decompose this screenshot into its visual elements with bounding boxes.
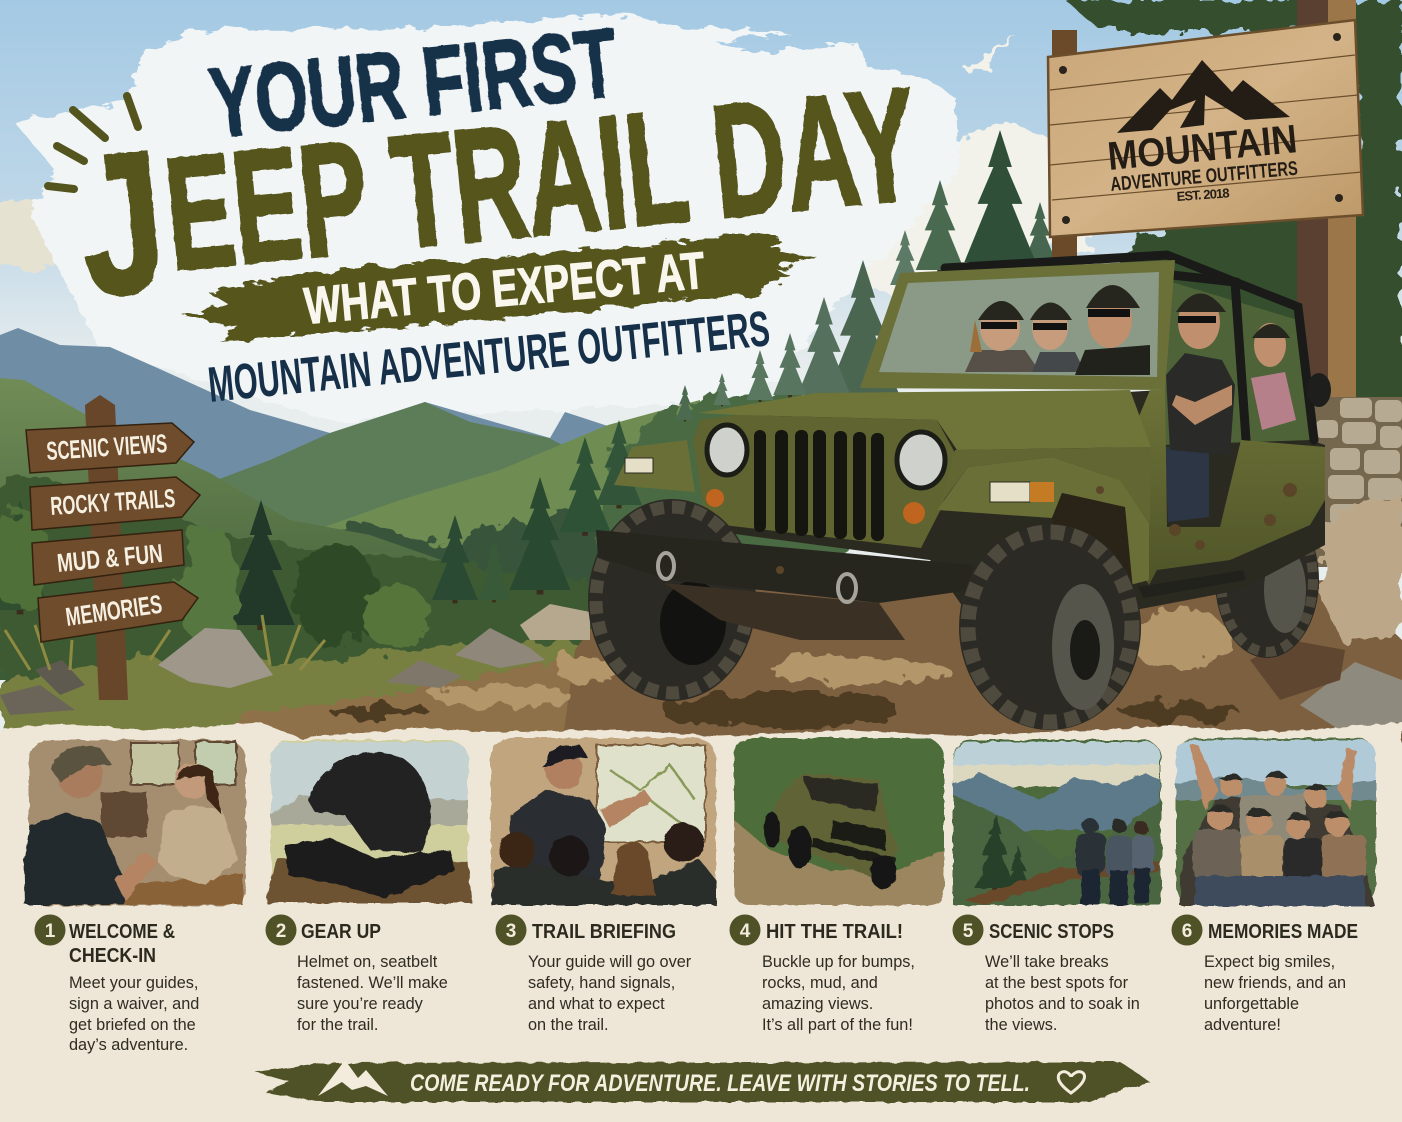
step 4 panel bbox=[730, 738, 944, 1034]
step 4 description: amazing views. bbox=[762, 995, 873, 1013]
arrow: rocky trails: ROCKY TRAILS bbox=[49, 483, 176, 521]
stone wall bbox=[1312, 397, 1402, 567]
arrow: memories bbox=[38, 582, 198, 642]
grille slats bbox=[754, 430, 884, 541]
step number 2 bbox=[266, 914, 296, 946]
hood bbox=[698, 390, 1151, 450]
step 4 description: Buckle up for bumps, bbox=[762, 953, 915, 971]
footer tagline: COME READY FOR ADVENTURE. LEAVE WITH STORIES TO TELL. bbox=[410, 1070, 1030, 1097]
tree canopy bbox=[1065, 0, 1402, 460]
sign subtitle: ADVENTURE OUTFITTERS bbox=[1110, 158, 1299, 196]
step 2 description: sure you’re ready bbox=[297, 995, 424, 1013]
cabin background bbox=[1160, 280, 1312, 445]
front left tire bbox=[588, 499, 756, 701]
mud splatter bbox=[776, 483, 1297, 574]
mirror bbox=[1307, 373, 1331, 407]
step 1 description: get briefed on the bbox=[69, 1016, 196, 1034]
wheel arch bbox=[1052, 493, 1133, 590]
rocks bbox=[0, 604, 590, 715]
step 3 description: Your guide will go over bbox=[528, 953, 692, 971]
step number 4 bbox=[730, 914, 760, 946]
side body bbox=[1100, 390, 1325, 585]
lower paper panel bbox=[0, 722, 1402, 1122]
step 5 description: We’ll take breaks bbox=[985, 953, 1109, 971]
step 5 panel bbox=[952, 740, 1161, 1034]
step 3 description: on the trail. bbox=[528, 1016, 609, 1034]
icon: heart bbox=[1058, 1072, 1085, 1093]
signpost bbox=[26, 395, 200, 700]
step 2 description: for the trail. bbox=[297, 1016, 378, 1034]
arrow: scenic views bbox=[26, 423, 194, 473]
step 6 description: Expect big smiles, bbox=[1204, 953, 1335, 971]
step number 1 bbox=[34, 914, 66, 946]
step 4 description: rocks, mud, and bbox=[762, 974, 878, 992]
sign name: MOUNTAIN bbox=[1106, 117, 1299, 179]
distant mountains bbox=[0, 328, 880, 680]
step 3 panel bbox=[491, 738, 716, 1034]
image: briefing bbox=[491, 738, 716, 905]
subtitle text: WHAT TO EXPECT AT bbox=[302, 242, 708, 336]
step 6 heading: MEMORIES MADE bbox=[1208, 921, 1358, 943]
grass tufts bbox=[5, 615, 325, 670]
windshield glass bbox=[879, 272, 1159, 377]
image: jeep on the trail bbox=[734, 738, 944, 905]
arrow: scenic views: SCENIC VIEWS bbox=[45, 428, 168, 466]
step 6 description: new friends, and an bbox=[1204, 974, 1346, 992]
side step bbox=[1138, 570, 1246, 598]
outfitter line: MOUNTAIN ADVENTURE OUTFITTERS bbox=[205, 300, 772, 413]
white brush area behind the title bbox=[15, 13, 960, 420]
hood side bbox=[940, 447, 1151, 523]
step 3 description: and what to expect bbox=[528, 995, 665, 1013]
step number 5 bbox=[952, 914, 984, 946]
step 4 description: It’s all part of the fun! bbox=[762, 1016, 913, 1034]
step 5 description: photos and to soak in bbox=[985, 995, 1140, 1013]
step 2 description: fastened. We’ll make bbox=[297, 974, 448, 992]
step number 3 bbox=[496, 914, 526, 946]
title line two: J bbox=[71, 109, 174, 339]
step 5 heading: SCENIC STOPS bbox=[989, 921, 1114, 943]
title line two bbox=[71, 54, 924, 339]
front right tire bbox=[959, 524, 1141, 730]
burst marks bbox=[48, 96, 138, 189]
wooden posts bbox=[1052, 0, 1356, 400]
sign established: EST. 2018 bbox=[1176, 185, 1230, 204]
icon: mountain logo bbox=[318, 1060, 388, 1096]
step 6 description: unforgettable bbox=[1204, 995, 1299, 1013]
image: group photo bbox=[1176, 738, 1376, 906]
rear wheel bbox=[1215, 502, 1319, 658]
tow hooks bbox=[658, 553, 856, 602]
front fender right bbox=[937, 457, 1149, 585]
image: helmet bbox=[266, 740, 472, 903]
step 2 heading: GEAR UP bbox=[301, 921, 381, 943]
forest trees bbox=[0, 130, 1056, 647]
step number 2: 2 bbox=[276, 921, 286, 942]
step 6 description: adventure! bbox=[1204, 1016, 1281, 1034]
ground and dirt trail bbox=[0, 640, 1402, 760]
step number 6: 6 bbox=[1182, 921, 1192, 942]
ground under jeep bbox=[560, 580, 1402, 760]
step 1 heading: WELCOME & bbox=[69, 921, 175, 943]
step number 3: 3 bbox=[506, 921, 516, 942]
arrow: mud and fun bbox=[32, 530, 184, 585]
undercarriage bbox=[664, 583, 905, 640]
arrow: mud and fun: MUD & FUN bbox=[56, 538, 164, 578]
footer banner bbox=[255, 1060, 1150, 1102]
step 1 description: Meet your guides, bbox=[69, 974, 198, 992]
front fender left bbox=[614, 440, 695, 492]
step 3 heading: TRAIL BRIEFING bbox=[532, 921, 676, 943]
step 1 description: day’s adventure. bbox=[69, 1036, 188, 1054]
arrow: rocky trails bbox=[30, 477, 200, 530]
step number 6 bbox=[1172, 914, 1202, 946]
step 5 description: the views. bbox=[985, 1016, 1057, 1034]
roll cage bbox=[945, 255, 1314, 440]
step 1 heading second line: CHECK-IN bbox=[69, 945, 156, 967]
subtitle banner bbox=[184, 233, 817, 342]
step 6 panel bbox=[1172, 738, 1376, 1034]
bushes bbox=[0, 510, 429, 647]
windshield frame bbox=[860, 260, 1175, 390]
step number 5: 5 bbox=[963, 921, 974, 942]
step 2 description: Helmet on, seatbelt bbox=[297, 953, 438, 971]
bumper bbox=[596, 530, 973, 603]
image: scenic viewpoint bbox=[953, 740, 1161, 905]
step 2 panel bbox=[266, 740, 472, 1034]
chassis shadow bbox=[700, 390, 1325, 610]
clouds right bbox=[0, 35, 1110, 300]
headlights bbox=[707, 425, 747, 475]
step 1 description: sign a waiver, and bbox=[69, 995, 199, 1013]
step 4 heading: HIT THE TRAIL! bbox=[766, 921, 903, 943]
arrow: memories: MEMORIES bbox=[64, 589, 164, 632]
dust cloud bbox=[1318, 495, 1402, 640]
step 1 panel bbox=[24, 740, 246, 1054]
brand sign bbox=[1048, 20, 1363, 237]
title line two: EEP TRAIL DAY bbox=[158, 54, 924, 304]
step number 1: 1 bbox=[45, 921, 56, 942]
dirt patches bbox=[430, 610, 1230, 707]
jeep illustration bbox=[588, 255, 1331, 730]
step number 4: 4 bbox=[740, 921, 751, 942]
passengers bbox=[965, 285, 1296, 522]
right rocks bbox=[1250, 640, 1402, 730]
front fascia bbox=[693, 415, 955, 548]
background sky bbox=[0, 0, 1402, 740]
step 5 description: at the best spots for bbox=[985, 974, 1129, 992]
image: check-in bbox=[24, 740, 246, 906]
step 3 description: safety, hand signals, bbox=[528, 974, 675, 992]
logo mountains bbox=[1117, 60, 1290, 133]
